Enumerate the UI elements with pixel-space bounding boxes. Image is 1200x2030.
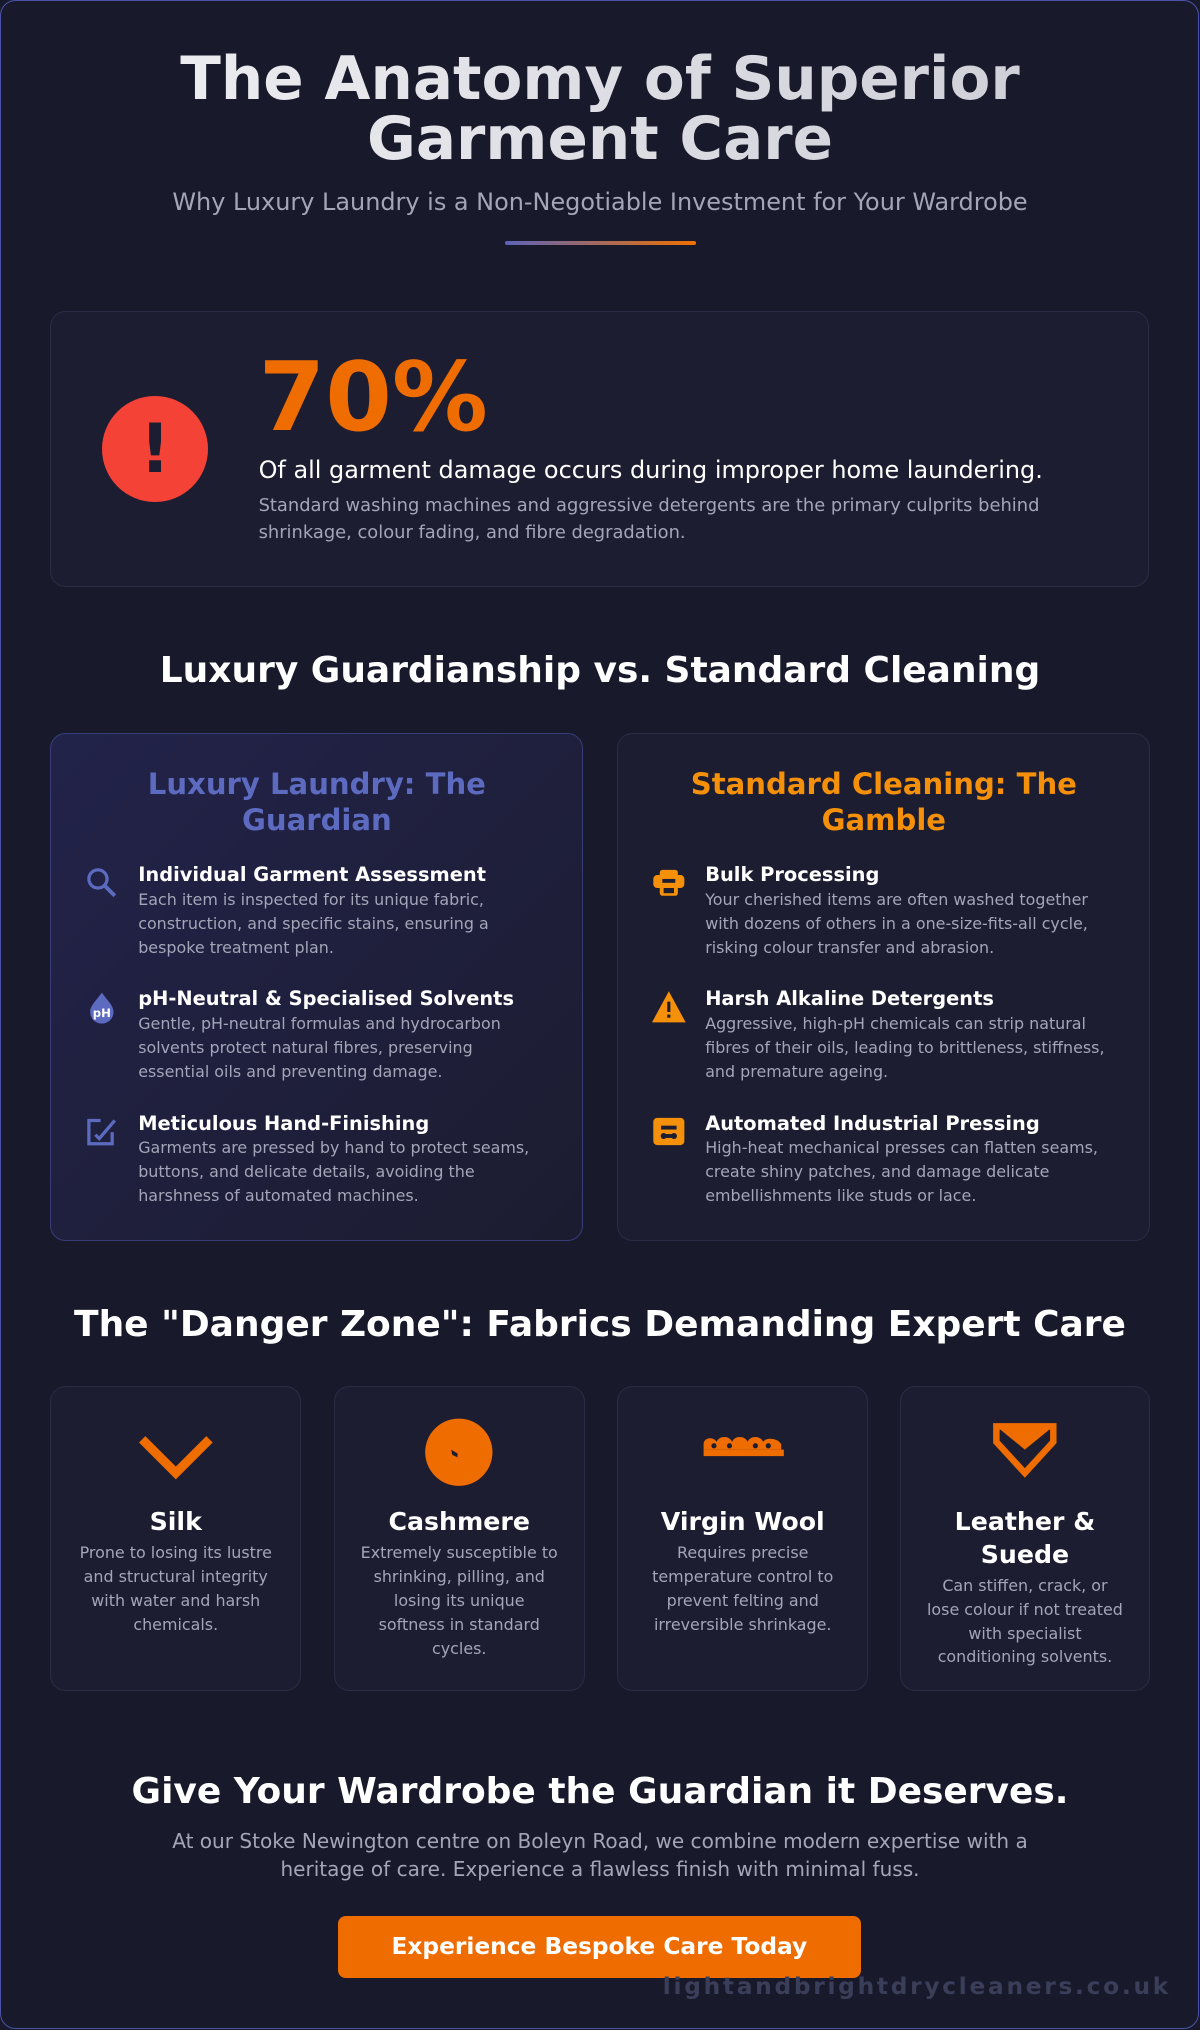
heading: standard: [691, 767, 1077, 837]
panel: virgin wool: Virgin Wool: [661, 1507, 825, 1536]
icon: silk: [139, 1436, 213, 1480]
item: solvents: Gentle, pH-neutral formulas and hydrocarbon solvents protect natural fibres, preserving essential oils and preventing damage.: [138, 1014, 501, 1081]
stat text: Of all garment damage occurs during improper home laundering.: [259, 456, 1043, 484]
item: detergents: [652, 987, 1105, 1081]
cta text: At our Stoke Newington centre on Boleyn Road, we combine modern expertise with a: [172, 1829, 1028, 1853]
watermark: lightandbrightdrycleaners.co.uk: [663, 1973, 1171, 2000]
accent line: [505, 241, 696, 245]
heading: standard: Standard Cleaning: The: [691, 767, 1077, 801]
item: pressing: Automated Industrial Pressing: [705, 1112, 1040, 1135]
title: [0, 50, 1200, 170]
item: detergents: Harsh Alkaline Detergents: [705, 987, 994, 1010]
item: assessment: Individual Garment Assessment: [138, 863, 486, 886]
title: Garment Care: [367, 105, 833, 174]
stat number: 70%: [259, 341, 488, 453]
panel: leather: [900, 1386, 1150, 1691]
heading: comparison: Luxury Guardianship vs. Standard Cleaning: [160, 650, 1040, 691]
item: bulk: Your cherished items are often washed together with dozens of others in a one-size-fits-all cycle, risking colour transfer and abrasion.: [705, 890, 1088, 957]
heading: luxury: Guardian: [242, 803, 392, 837]
panel: leather: Suede: [981, 1540, 1069, 1569]
item: solvents: [90, 987, 514, 1081]
icon: leather: [993, 1423, 1057, 1478]
heading: luxury: Luxury Laundry: The: [148, 767, 486, 801]
item: assessment: Each item is inspected for its unique fabric, construction, and specific stains, ensuring a bespoke treatment plan.: [138, 890, 489, 957]
panel: standard cleaning: [617, 733, 1150, 1241]
stat text: [259, 456, 1043, 543]
panel: cashmere: losing its unique: [394, 1591, 525, 1610]
panel: stat: [50, 311, 1149, 587]
panel: cashmere: cycles.: [432, 1639, 486, 1658]
title: The Anatomy of Superior: [180, 45, 1020, 114]
item: assessment: [87, 863, 489, 957]
panel: cashmere: Extremely susceptible to: [361, 1543, 558, 1562]
panel: luxury laundry: [50, 733, 583, 1241]
heading: danger zone: The "Danger Zone": Fabrics Demanding Expert Care: [74, 1304, 1126, 1345]
heading: cta: Give Your Wardrobe the Guardian it Deserves.: [132, 1771, 1068, 1812]
item: pressing: [653, 1112, 1098, 1205]
item: solvents: pH-Neutral & Specialised Solvents: [138, 987, 514, 1010]
item: solvents: pH: [93, 1006, 111, 1020]
panel: virgin wool: [617, 1386, 868, 1691]
item: bulk: Bulk Processing: [705, 863, 879, 886]
item: pressing: High-heat mechanical presses can flatten seams, create shiny patches, and damage delicate embellishments like studs or lace.: [705, 1138, 1098, 1205]
item: hand finishing: Garments are pressed by hand to protect seams, buttons, and delicate details, avoiding the harshness of automated machines.: [138, 1138, 529, 1205]
panel: silk: Silk: [150, 1507, 202, 1536]
item: bulk: [653, 863, 1088, 957]
button: [338, 1916, 861, 1978]
icon: alert: !: [140, 410, 170, 488]
icon: alert: [102, 396, 208, 502]
icon: cashmere: [425, 1418, 492, 1486]
stat text: Standard washing machines and aggressive detergents are the primary culprits behind shrinkage, colour fading, and fibre degradation.: [259, 495, 1039, 543]
panel: cashmere: Cashmere: [388, 1507, 530, 1536]
panel: cashmere: softness in standard: [379, 1615, 540, 1634]
panel: silk: [50, 1386, 301, 1691]
heading: standard: Gamble: [822, 803, 946, 837]
button: Experience Bespoke Care Today: [391, 1933, 807, 1960]
cta text: heritage of care. Experience a flawless finish with minimal fuss.: [280, 1857, 920, 1881]
panel: leather: Can stiffen, crack, or lose colour if not treated with specialist conditioning solvents.: [927, 1576, 1123, 1666]
item: hand finishing: Meticulous Hand-Finishing: [138, 1112, 429, 1135]
panel: virgin wool: Requires precise temperature control to prevent felting and irreversible shrinkage.: [652, 1543, 833, 1634]
panel: silk: Prone to losing its lustre and structural integrity with water and harsh chemicals.: [80, 1543, 272, 1634]
item: detergents: Aggressive, high-pH chemicals can strip natural fibres of their oils, leading to brittleness, stiffness, and premature ageing.: [705, 1014, 1105, 1081]
icon: wool: [704, 1437, 784, 1456]
panel: leather: Leather &: [955, 1507, 1095, 1536]
panel: cashmere: [334, 1386, 584, 1691]
panel: cashmere: shrinking, pilling, and: [374, 1567, 545, 1586]
item: hand finishing: [87, 1112, 529, 1205]
heading: luxury: [148, 767, 486, 837]
subtitle: Why Luxury Laundry is a Non-Negotiable Investment for Your Wardrobe: [172, 188, 1028, 216]
cta text: [172, 1829, 1028, 1881]
